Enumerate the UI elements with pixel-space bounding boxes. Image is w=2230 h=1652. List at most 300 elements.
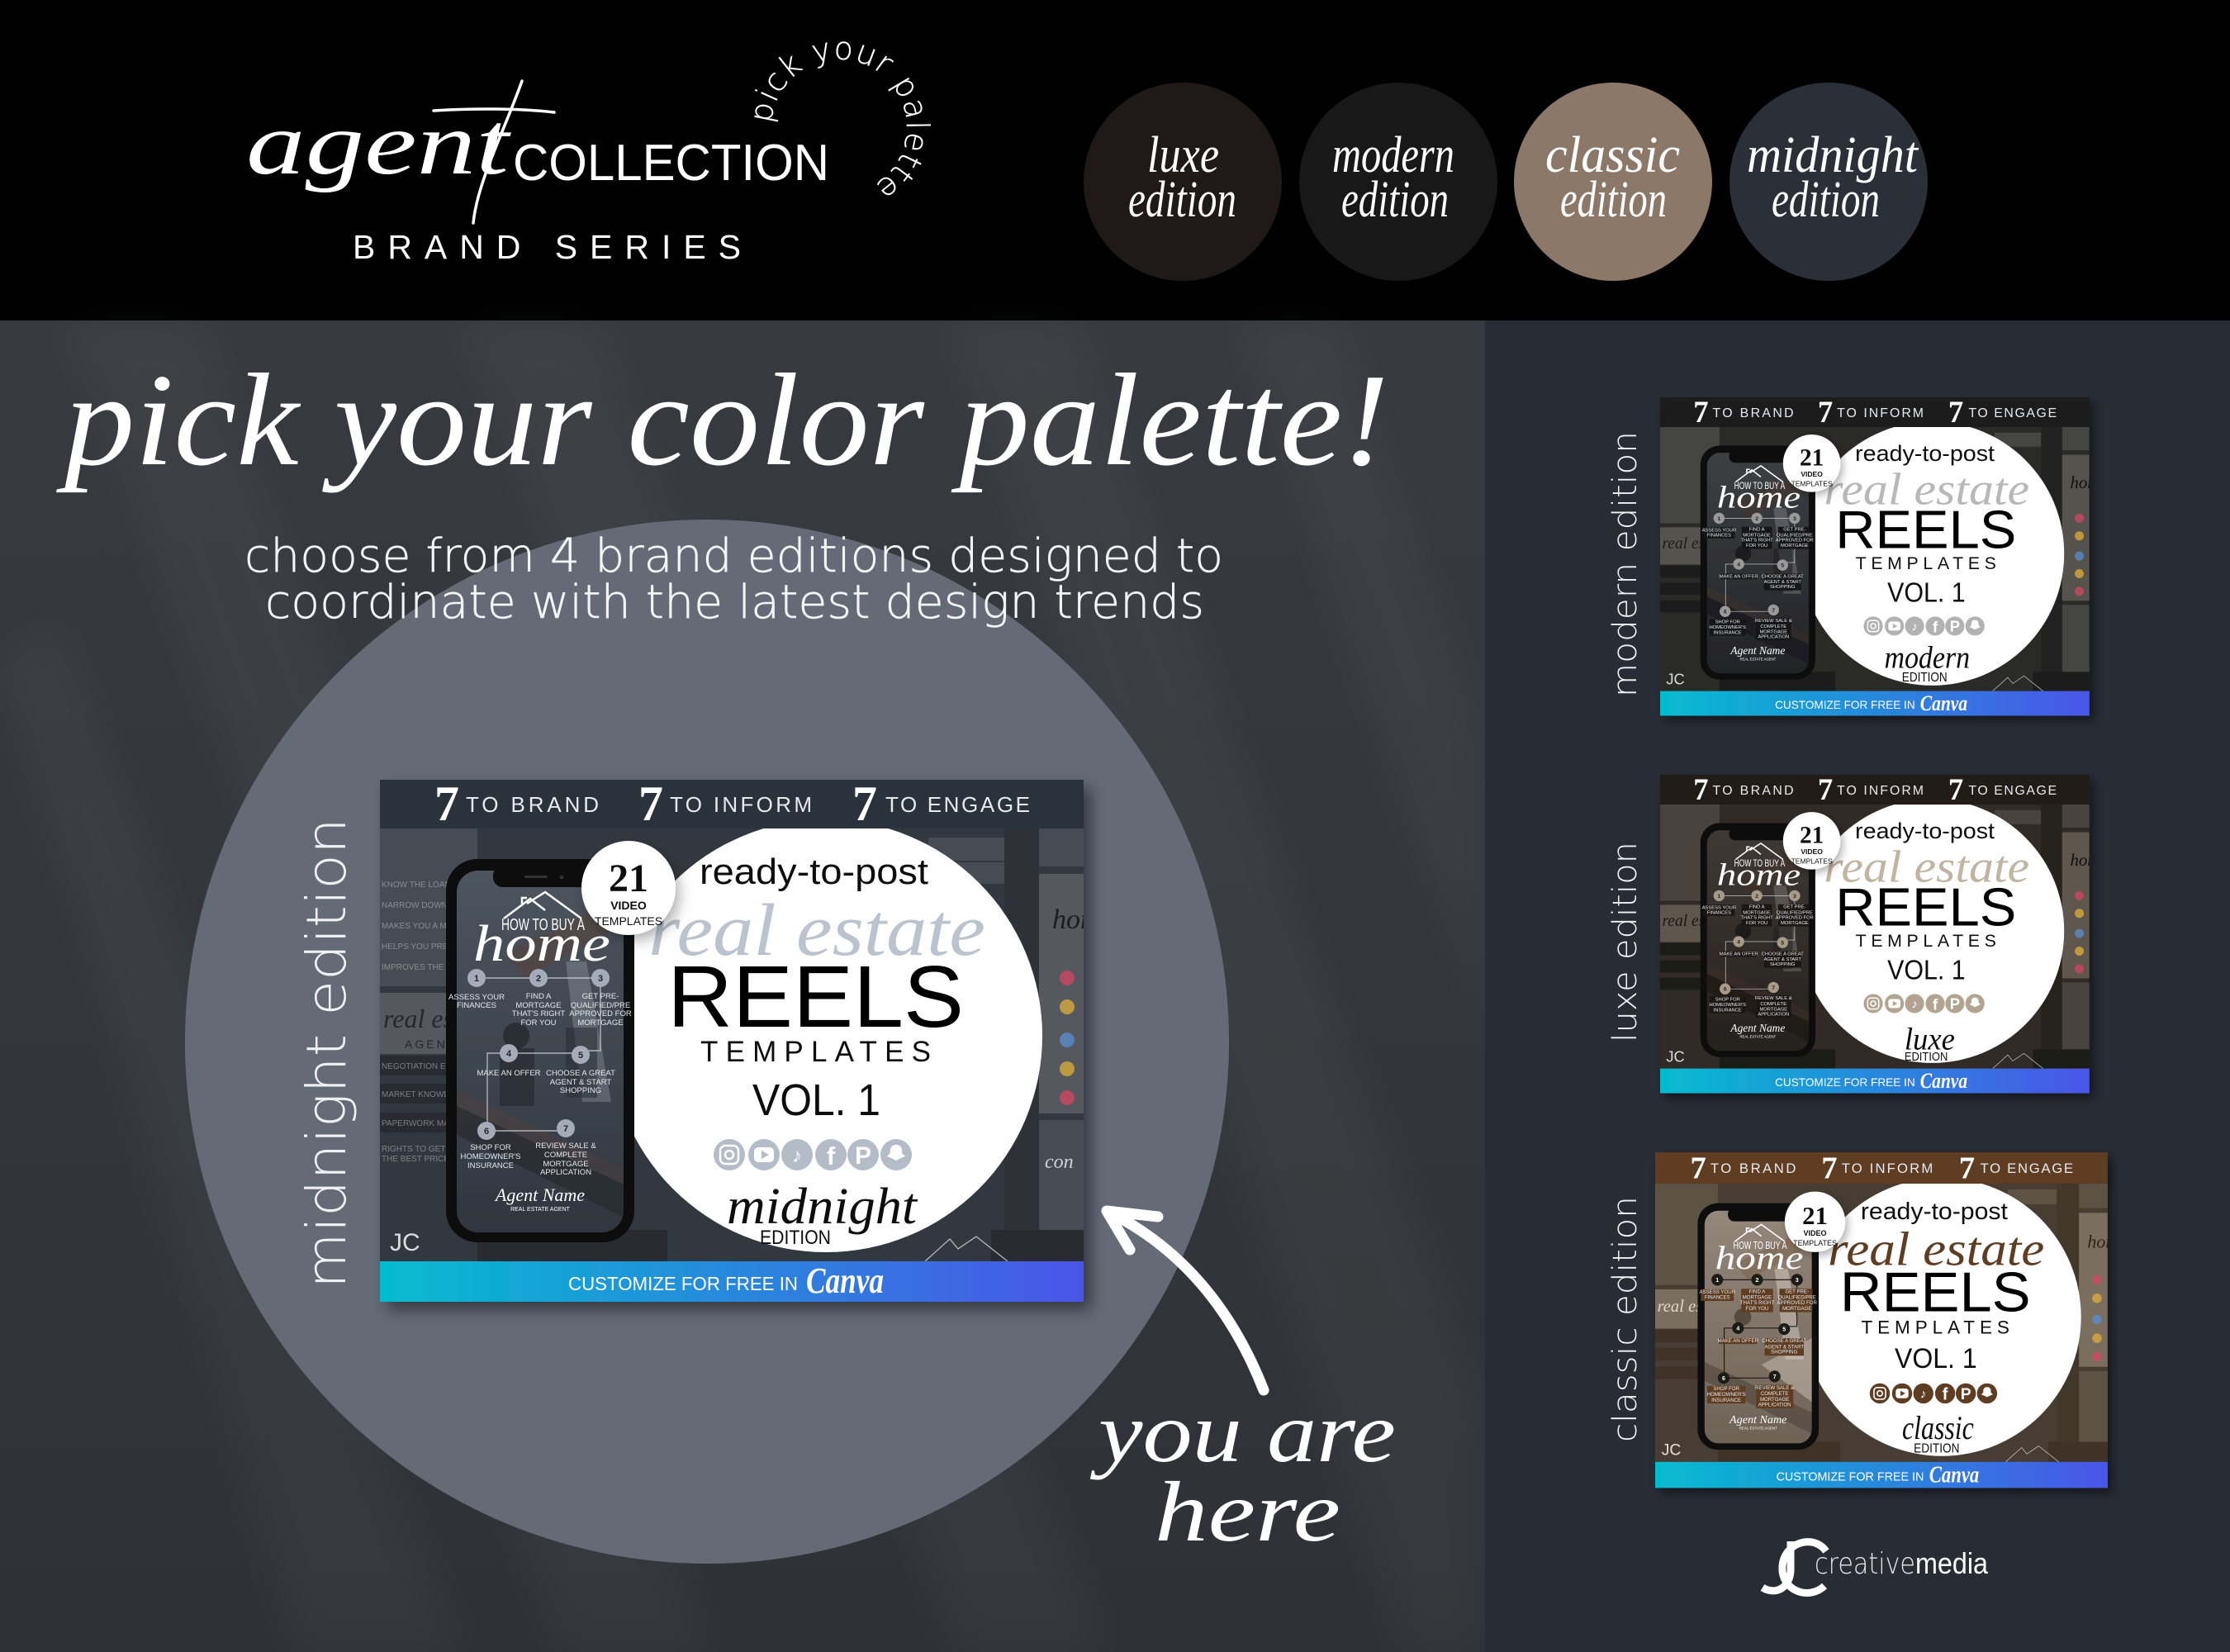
steps: 7 <box>563 1124 568 1134</box>
steps: INSURANCE <box>467 1161 514 1170</box>
steps: MORTGAGE <box>1743 533 1771 538</box>
bottom canva band <box>1660 691 2090 716</box>
steps: 7 <box>1772 608 1775 614</box>
top band: 7 <box>852 776 877 831</box>
logo: jc creativemedia <box>1763 1541 1989 1593</box>
steps: QUALIFIED/PRE <box>1777 1294 1816 1300</box>
steps: GET PRE- <box>1783 905 1806 910</box>
badge: 21 video templates: 21 <box>609 857 648 900</box>
steps: AGENT & START <box>1764 957 1801 962</box>
steps: GET PRE- <box>1785 1289 1809 1294</box>
steps: APPLICATION <box>1758 1013 1789 1018</box>
steps: 7 <box>1773 1374 1777 1380</box>
edition badge: luxe <box>1084 83 1282 281</box>
steps: 6 <box>1724 610 1727 615</box>
phone headline: HOW TO BUY A <box>1734 480 1786 491</box>
edition badge: modern: edition <box>1341 172 1449 228</box>
steps: MORTGAGE <box>543 1160 589 1169</box>
collage background: real est <box>383 1004 462 1033</box>
top band: TO INFORM <box>1842 1161 1933 1176</box>
steps: CHOOSE A GREAT <box>546 1069 615 1078</box>
steps: CHOOSE A GREAT <box>1762 574 1804 579</box>
logo: jc creativemedia: media <box>1915 1546 1989 1580</box>
vertical label: classic edition: classic edition <box>1606 1196 1644 1442</box>
phone mockup <box>1697 1203 1819 1450</box>
badge: 21 video templates: 21 <box>1802 1202 1828 1230</box>
collage background: KNOW THE LOAN AMOUNT <box>382 881 488 890</box>
collage background: hom <box>2087 1232 2118 1252</box>
top band: TO BRAND <box>1712 784 1794 798</box>
steps: 4 <box>506 1049 512 1059</box>
top band <box>1655 1151 2108 1186</box>
bottom canva band: Canva <box>806 1260 884 1301</box>
phone headline: HOW TO BUY A <box>501 916 585 934</box>
templates: TEMPLATES <box>1856 553 1996 573</box>
volume: VOL. 1 <box>1887 955 1966 985</box>
steps: FOR YOU <box>1746 1306 1768 1312</box>
agent name: Agent Name <box>494 1184 585 1205</box>
steps: APPLICATION <box>540 1168 591 1177</box>
social icons: P <box>855 1142 871 1170</box>
agent name: Agent Name <box>1729 1022 1785 1034</box>
top band: TO INFORM <box>1837 406 1924 420</box>
phone mockup <box>446 859 634 1242</box>
social icons: ♪ <box>1911 998 1918 1011</box>
steps: SHOPPING <box>560 1086 601 1095</box>
white circle <box>1801 421 2064 686</box>
agent name: Agent Name <box>1729 644 1785 657</box>
phone headline: HOW TO BUY A <box>1734 857 1786 869</box>
steps: CHOOSE A GREAT <box>1762 1338 1806 1344</box>
volume: VOL. 1 <box>1887 577 1966 608</box>
steps: GET PRE- <box>1783 528 1806 533</box>
bottom canva band <box>1660 1068 2090 1094</box>
social icons: ♪ <box>1920 1388 1927 1402</box>
edition wordmark: classic <box>1902 1409 1974 1446</box>
steps: APPROVED FOR <box>1776 915 1814 920</box>
social icons <box>1863 994 1985 1014</box>
top band: 7 <box>434 776 459 831</box>
edition badge: midnight: edition <box>1772 172 1880 228</box>
steps: SHOPPING <box>1771 1350 1798 1355</box>
steps: THAT'S RIGHT <box>512 1009 565 1018</box>
title: pick your color palette! <box>55 346 1389 493</box>
large circle behind main preview <box>185 520 1229 1564</box>
ready-to-post: ready-to-post <box>700 852 928 892</box>
collage background: NARROW DOWN YOUR <box>382 901 473 910</box>
steps: MORTGAGE <box>1782 1306 1811 1312</box>
steps: QUALIFIED/PRE <box>1777 533 1813 538</box>
bottom canva band: Canva <box>1929 1462 1979 1488</box>
top band: 7 <box>1690 1151 1706 1186</box>
collage background: real est <box>1662 535 1710 553</box>
preview card: classic edition <box>1655 1151 2118 1488</box>
steps: 1 <box>474 974 479 984</box>
steps: HOMEOWNER'S <box>460 1152 521 1161</box>
right background panel <box>1485 320 2230 1652</box>
reels: REELS <box>667 948 964 1046</box>
badge: 21 video templates <box>1785 1192 1845 1252</box>
steps: 3 <box>1793 516 1796 522</box>
steps: APPLICATION <box>1758 635 1789 640</box>
steps: INSURANCE <box>1714 631 1742 636</box>
steps: FINANCES <box>1707 533 1731 538</box>
steps: FIND A <box>1749 528 1765 533</box>
steps <box>448 969 632 1177</box>
steps: REVIEW SALE & <box>1755 619 1792 624</box>
edition wordmark: modern <box>1884 641 1970 676</box>
edition badge: luxe: edition <box>1128 172 1236 228</box>
collage background: AGEN <box>405 1037 448 1051</box>
collage background: NEGOTIATION EXPERT <box>382 1062 473 1071</box>
edition wordmark: EDITION <box>760 1227 831 1249</box>
collage background: HELPS YOU PRESENT A <box>382 942 477 952</box>
top band: 7 <box>1693 395 1709 429</box>
steps: SHOPPING <box>1770 585 1796 590</box>
steps: ASSESS YOUR <box>1702 528 1736 533</box>
steps: MORTGAGE <box>1759 629 1787 634</box>
real estate script: real estate <box>648 890 985 971</box>
logo: jc creativemedia: creative <box>1815 1547 1915 1581</box>
top band <box>1660 395 2090 429</box>
steps: CHOOSE A GREAT <box>1762 952 1804 957</box>
edition badge: luxe: luxe <box>1147 127 1219 183</box>
top band: 7 <box>1948 395 1963 429</box>
steps: 5 <box>1782 1327 1786 1333</box>
vertical label: midnight edition: midnight edition <box>295 818 358 1289</box>
phone headline: home <box>1717 481 1801 515</box>
steps: 6 <box>484 1127 489 1137</box>
steps: MAKE AN OFFER <box>1718 1338 1759 1344</box>
steps: MORTGAGE <box>577 1018 624 1028</box>
collage background: JC <box>1662 1442 1681 1460</box>
steps: 4 <box>1737 939 1740 945</box>
steps: MORTGAGE <box>1743 1294 1772 1300</box>
steps: REVIEW SALE & <box>1755 996 1792 1001</box>
edition wordmark: midnight <box>727 1179 918 1235</box>
steps: FINANCES <box>1705 1294 1730 1300</box>
top band <box>1660 772 2090 806</box>
steps: FINANCES <box>457 1001 496 1010</box>
steps: 1 <box>1718 516 1721 522</box>
top band <box>380 776 1084 831</box>
left background panel <box>0 320 1485 1652</box>
preview card: modern edition <box>1660 395 2100 716</box>
bottom canva band <box>1655 1462 2108 1488</box>
steps: GET PRE- <box>582 992 619 1001</box>
steps: 2 <box>1755 516 1758 522</box>
bottom canva band <box>380 1260 1084 1302</box>
ready-to-post: ready-to-post <box>1861 1198 2008 1224</box>
agent name: Agent Name <box>1729 1413 1786 1427</box>
collage background: hom <box>1052 904 1101 935</box>
bottom canva band: Canva <box>1920 691 1967 715</box>
collage background: MAKES YOU A MORE <box>382 922 465 931</box>
badge: 21 video templates: 21 <box>1800 822 1824 848</box>
social icons: f <box>827 1142 836 1170</box>
edition wordmark: EDITION <box>1902 671 1948 685</box>
edition badge: classic: classic <box>1545 127 1680 183</box>
steps: REVIEW SALE & <box>535 1142 596 1151</box>
top band: TO BRAND <box>1712 406 1794 420</box>
ready-to-post: ready-to-post <box>1855 441 1995 466</box>
steps: COMPLETE <box>544 1151 587 1160</box>
steps: FIND A <box>526 992 552 1001</box>
steps <box>1702 890 1814 1018</box>
steps: 5 <box>578 1051 583 1061</box>
steps: MAKE AN OFFER <box>1720 574 1758 579</box>
subtitle <box>244 529 1223 629</box>
steps: 1 <box>1715 1278 1719 1284</box>
steps: APPLICATION <box>1758 1402 1791 1408</box>
steps: 6 <box>1724 987 1727 993</box>
badge: 21 video templates: TEMPLATES <box>595 914 662 928</box>
top band: TO ENGAGE <box>1968 784 2057 798</box>
collage background: JC <box>1666 671 1685 688</box>
top band: 7 <box>638 776 663 831</box>
steps: COMPLETE <box>1760 1002 1786 1007</box>
collage background: PAPERWORK MANAGE <box>382 1119 473 1128</box>
logo: agent collection brand series: COLLECTION <box>513 135 829 192</box>
reels: REELS <box>1840 1260 2031 1323</box>
steps: INSURANCE <box>1714 1009 1742 1014</box>
top band: TO BRAND <box>466 792 599 817</box>
badge: 21 video templates: VIDEO <box>1801 470 1823 478</box>
steps: COMPLETE <box>1760 624 1786 629</box>
steps: FIND A <box>1749 1289 1766 1294</box>
real estate script: real estate <box>1824 841 2029 891</box>
steps: 4 <box>1736 1326 1739 1332</box>
phone mockup <box>1701 446 1815 680</box>
social icons <box>1863 616 1985 636</box>
edition badge: modern <box>1299 83 1497 281</box>
phone headline <box>1717 466 1801 515</box>
real estate script: real estate <box>1824 463 2029 514</box>
social icons: ♪ <box>1911 620 1918 634</box>
steps: SHOP FOR <box>1715 997 1740 1002</box>
top band: TO ENGAGE <box>1968 406 2057 420</box>
templates: TEMPLATES <box>700 1036 931 1068</box>
steps: AGENT & START <box>550 1078 611 1087</box>
steps: FOR YOU <box>1746 544 1767 548</box>
steps: MAKE AN OFFER <box>477 1069 541 1078</box>
collage background: MARKET KNOWLEDGE <box>382 1090 472 1099</box>
logo: agent collection brand series: agent <box>246 95 512 193</box>
collage background <box>1660 805 2100 1069</box>
reels: REELS <box>1835 876 2016 937</box>
steps: THAT'S RIGHT <box>1740 1300 1774 1306</box>
top band: 7 <box>1818 772 1833 806</box>
collage background <box>1660 427 2100 691</box>
social icons: P <box>1950 995 1960 1013</box>
top band: TO ENGAGE <box>1981 1161 2073 1176</box>
phone headline: home <box>1717 858 1801 893</box>
steps: SHOPPING <box>1770 962 1796 967</box>
social icons: f <box>1943 1386 1948 1404</box>
volume: VOL. 1 <box>1895 1343 1977 1374</box>
ready-to-post: ready-to-post <box>1855 819 1995 843</box>
preview card: luxe edition <box>1660 772 2100 1094</box>
steps: SHOP FOR <box>470 1143 511 1152</box>
steps: MORTGAGE <box>1743 910 1771 915</box>
steps: FINANCES <box>1707 910 1731 915</box>
steps: MORTGAGE <box>515 1001 562 1010</box>
white circle <box>610 819 1042 1252</box>
steps: MORTGAGE <box>1759 1007 1787 1012</box>
steps: INSURANCE <box>1711 1398 1741 1403</box>
steps: SHOP FOR <box>1713 1386 1740 1392</box>
steps: 2 <box>1755 1278 1758 1284</box>
steps <box>1702 513 1814 640</box>
curved text: pick your palette: pick your palette <box>754 41 932 195</box>
white circle <box>1801 799 2064 1063</box>
agent name: REAL ESTATE AGENT <box>510 1207 571 1213</box>
templates: TEMPLATES <box>1861 1317 2009 1337</box>
steps: HOMEOWNER'S <box>1707 1392 1746 1398</box>
badge: 21 video templates: TEMPLATES <box>1793 1239 1837 1247</box>
you are here <box>1090 1385 1396 1559</box>
top band: 7 <box>1959 1151 1975 1186</box>
steps: QUALIFIED/PRE <box>571 1001 630 1010</box>
phone headline <box>473 892 610 972</box>
steps: FOR YOU <box>1746 921 1767 926</box>
steps: 2 <box>1755 894 1758 900</box>
real estate script: real estate <box>1828 1222 2044 1275</box>
steps: 4 <box>1737 562 1740 567</box>
top band: TO ENGAGE <box>885 792 1030 817</box>
edition badge: midnight: midnight <box>1747 127 1919 183</box>
steps: 2 <box>536 974 541 984</box>
steps: ASSESS YOUR <box>1699 1289 1736 1295</box>
vertical label: modern edition: modern edition <box>1606 431 1644 697</box>
social icons: ♪ <box>792 1145 802 1167</box>
edition badge: modern: modern <box>1332 127 1454 183</box>
steps: APPROVED FOR <box>1777 1300 1817 1306</box>
steps: ASSESS YOUR <box>1702 905 1736 910</box>
phone mockup <box>1701 824 1815 1057</box>
top band: 7 <box>1693 772 1709 806</box>
collage background: con <box>1045 1151 1074 1173</box>
steps: MORTGAGE <box>1781 921 1809 926</box>
logo: agent collection brand series: BRAND SERIES <box>353 228 741 266</box>
volume: VOL. 1 <box>752 1075 880 1125</box>
steps: SHOP FOR <box>1715 620 1740 624</box>
badge: 21 video templates: VIDEO <box>610 899 647 912</box>
steps: 3 <box>1796 1278 1799 1284</box>
collage background: RIGHTS TO GET YOU <box>382 1145 466 1154</box>
steps: ASSESS YOUR <box>448 993 505 1002</box>
badge: 21 video templates: VIDEO <box>1804 1229 1827 1237</box>
edition wordmark <box>1902 1409 1974 1455</box>
steps: 6 <box>1722 1376 1725 1382</box>
social icons: f <box>1933 619 1938 636</box>
phone headline: home <box>473 916 610 972</box>
white circle <box>1803 1178 2081 1456</box>
header band <box>0 0 2230 320</box>
main preview card: midnight edition <box>380 776 1101 1302</box>
subtitle: coordinate with the latest design trends <box>265 576 1204 629</box>
top band: TO INFORM <box>1837 784 1924 798</box>
badge: 21 video templates <box>1783 812 1840 870</box>
collage background: real est <box>1658 1298 1708 1316</box>
phone headline <box>1717 843 1801 893</box>
top band: TO INFORM <box>670 792 812 817</box>
top band: TO BRAND <box>1710 1161 1796 1176</box>
steps: MAKE AN OFFER <box>1720 952 1758 957</box>
steps: 7 <box>1772 985 1775 991</box>
steps: 5 <box>1781 941 1784 947</box>
social icons: P <box>1961 1386 1971 1403</box>
social icons: f <box>1933 996 1938 1014</box>
agent name: REAL ESTATE AGENT <box>1739 657 1777 661</box>
top band: 7 <box>1818 395 1833 429</box>
steps: APPROVED FOR <box>1776 538 1814 543</box>
steps: COMPLETE <box>1761 1391 1788 1397</box>
collage background <box>1655 1184 2118 1462</box>
subtitle: choose from 4 brand editions designed to <box>244 529 1223 583</box>
badge: 21 video templates: TEMPLATES <box>1791 479 1833 487</box>
you are here: here <box>1155 1464 1340 1559</box>
bottom canva band: Canva <box>1920 1068 1967 1093</box>
steps: REVIEW SALE & <box>1755 1385 1794 1391</box>
arrow <box>1107 1211 1264 1390</box>
steps: AGENT & START <box>1764 580 1801 585</box>
collage background: JC <box>1666 1048 1685 1066</box>
collage background: real est <box>1662 913 1710 930</box>
phone headline: home <box>1715 1239 1803 1276</box>
reels: REELS <box>1835 499 2016 559</box>
templates: TEMPLATES <box>1856 931 1996 951</box>
bottom canva band: CUSTOMIZE FOR FREE IN <box>568 1273 798 1294</box>
steps: QUALIFIED/PRE <box>1777 910 1813 915</box>
agent name: REAL ESTATE AGENT <box>1739 1427 1777 1431</box>
bottom canva band: CUSTOMIZE FOR FREE IN <box>1775 698 1915 711</box>
top band: 7 <box>1821 1151 1838 1186</box>
badge: 21 video templates: VIDEO <box>1801 847 1823 856</box>
steps: 3 <box>1793 894 1796 900</box>
steps: 1 <box>1718 894 1721 900</box>
social icons <box>714 1139 912 1170</box>
steps: THAT'S RIGHT <box>1741 538 1773 543</box>
bottom canva band: CUSTOMIZE FOR FREE IN <box>1777 1470 1924 1483</box>
vertical label: luxe edition: luxe edition <box>1606 842 1644 1042</box>
steps: APPROVED FOR <box>569 1009 632 1018</box>
steps: 5 <box>1781 563 1784 569</box>
edition wordmark: EDITION <box>1914 1441 1959 1455</box>
edition badge: classic <box>1514 83 1712 281</box>
steps: HOMEOWNER'S <box>1710 625 1746 630</box>
edition wordmark: luxe <box>1905 1022 1955 1056</box>
phone headline: HOW TO BUY A <box>1734 1239 1787 1251</box>
social icons: P <box>1950 618 1960 635</box>
phone headline <box>1715 1224 1803 1276</box>
agent name: REAL ESTATE AGENT <box>1739 1034 1777 1038</box>
bottom canva band: CUSTOMIZE FOR FREE IN <box>1775 1075 1915 1089</box>
steps: AGENT & START <box>1764 1344 1804 1350</box>
badge: 21 video templates: 21 <box>1800 444 1824 471</box>
steps: THAT'S RIGHT <box>1741 915 1773 920</box>
collage background: IMPROVES THE TIMELINES <box>382 963 490 972</box>
collage background <box>380 828 1101 1261</box>
collage background: hom <box>2071 474 2100 492</box>
edition wordmark: EDITION <box>1905 1051 1948 1064</box>
social icons <box>1870 1384 1997 1404</box>
badge: 21 video templates <box>581 841 676 935</box>
collage background: THE BEST PRICE <box>382 1155 449 1164</box>
collage background: hom <box>2071 852 2100 870</box>
steps: HOMEOWNER'S <box>1710 1003 1746 1008</box>
edition badge: midnight <box>1729 83 1928 281</box>
